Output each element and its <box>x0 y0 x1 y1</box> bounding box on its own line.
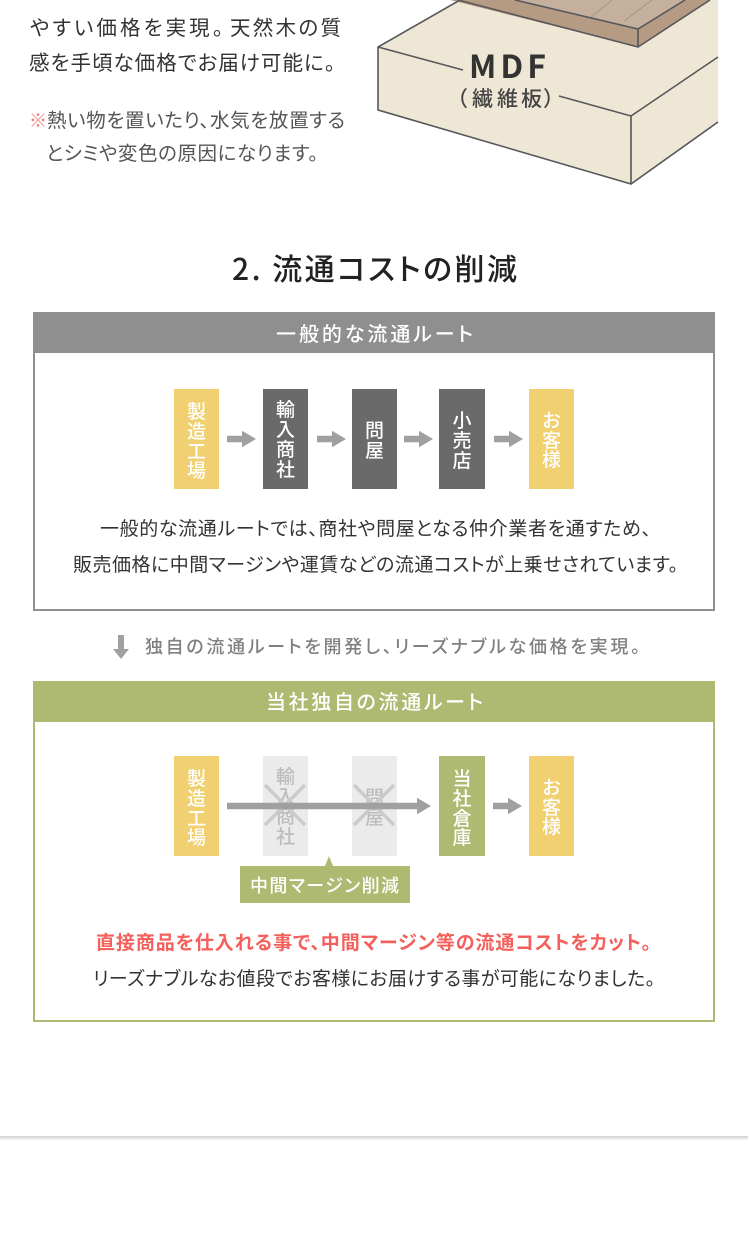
panel header: own route: 当社独自の流通ルート <box>266 691 483 714</box>
flow: removed trading company: 社 <box>276 826 295 848</box>
section heading: 2. 流通コストの削減 <box>232 245 517 289</box>
caution note <box>29 110 345 165</box>
flow: removed trading company: 輸 <box>276 766 295 788</box>
flow: customer: 客 <box>542 797 561 819</box>
intro text <box>29 17 341 75</box>
flow: factory <box>174 389 219 489</box>
flow: factory: 造 <box>187 421 206 443</box>
description <box>73 518 678 576</box>
caution note: ※ <box>29 111 47 131</box>
flow: removed wholesaler: 屋 <box>365 808 384 829</box>
panel header: own route <box>33 681 715 722</box>
flow: removed wholesaler <box>352 756 397 856</box>
flow: customer: お <box>542 778 561 799</box>
panel: own route <box>33 681 715 1021</box>
flow: wholesaler <box>352 389 397 489</box>
illustration: MDF board: （ <box>447 83 468 113</box>
flow: factory: 場 <box>187 460 206 482</box>
flow: factory: 製 <box>187 401 206 423</box>
transition text: 独自の流通ルートを開発し、リーズナブルな価格を実現。 <box>145 636 640 657</box>
flow: customer <box>529 389 574 489</box>
flow: own warehouse: 社 <box>452 788 472 810</box>
flow: customer: 客 <box>542 430 561 452</box>
flow: customer: 様 <box>542 816 561 838</box>
arrow <box>317 431 346 447</box>
flow: retailer: 売 <box>452 430 472 452</box>
illustration: MDF board: ） <box>543 83 564 113</box>
arrow <box>494 431 523 447</box>
long arrow <box>227 798 431 814</box>
flow: removed trading company <box>263 756 308 856</box>
flow: factory: 場 <box>187 827 206 849</box>
flow: customer: お <box>542 411 561 432</box>
panel header: standard route: 一般的な流通ルート <box>276 323 473 346</box>
flow: factory: 製 <box>187 768 206 790</box>
arrow <box>227 431 256 447</box>
flow: removed trading company: 商 <box>276 806 295 828</box>
flow: trading company <box>263 389 308 489</box>
panel header: standard route <box>33 312 715 353</box>
flow: factory: 工 <box>187 809 206 830</box>
flow: trading company: 輸 <box>276 399 295 421</box>
flow: factory <box>174 756 219 856</box>
flow: wholesaler: 屋 <box>365 441 384 462</box>
highlighted description: 直接商品を仕入れる事で、中間マージン等の流通コストをカット。 <box>96 932 651 954</box>
illustration: MDF board <box>378 0 718 184</box>
flow: trading company: 社 <box>276 459 295 481</box>
flow: customer <box>529 756 574 856</box>
arrow <box>404 431 433 447</box>
flow: own warehouse: 庫 <box>452 827 472 849</box>
callout: margin reduction: 中間マージン削減 <box>250 876 399 896</box>
illustration: MDF board: 板 <box>521 83 542 113</box>
flow: retailer: 小 <box>452 410 472 432</box>
flow: factory: 工 <box>187 442 206 463</box>
intro text: やすい価格を実現。 <box>30 17 223 40</box>
caution note: とシミや変色の原因になります。 <box>46 143 318 165</box>
flow: removed wholesaler: 問 <box>365 788 384 809</box>
intro text: 感を手頃な価格でお届け可能に。 <box>29 52 335 75</box>
flow: factory: 造 <box>187 788 206 810</box>
transition arrow <box>113 635 129 659</box>
footer divider <box>0 1136 748 1140</box>
flow: customer: 様 <box>542 449 561 471</box>
description: 販売価格に中間マージンや運賃などの流通コストが上乗せされています。 <box>73 554 678 576</box>
illustration: MDF board: MDF <box>469 42 546 88</box>
flow: own warehouse: 当 <box>452 768 472 790</box>
flow: trading company: 商 <box>276 439 295 461</box>
flow: retailer <box>439 389 485 489</box>
intro text: 天然木の質 <box>230 17 341 40</box>
flow: own warehouse: 倉 <box>452 808 472 830</box>
description: 一般的な流通ルートでは、商社や問屋となる仲介業者を通すため、 <box>100 518 651 540</box>
arrow <box>493 798 522 814</box>
description: リーズナブルなお値段でお客様にお届けする事が可能になりました。 <box>93 967 655 990</box>
flow: retailer: 店 <box>452 450 472 472</box>
callout: margin reduction <box>240 856 410 903</box>
illustration: MDF board: 維 <box>497 83 518 113</box>
panel: standard route <box>33 312 715 610</box>
flow: own warehouse <box>439 756 485 856</box>
caution note: 熱い物を置いたり、水気を放置する <box>47 110 345 132</box>
flow: wholesaler: 問 <box>365 421 384 442</box>
illustration: MDF board: 繊 <box>472 83 493 113</box>
flow: removed trading company: 入 <box>276 787 295 808</box>
flow: trading company: 入 <box>276 420 295 441</box>
